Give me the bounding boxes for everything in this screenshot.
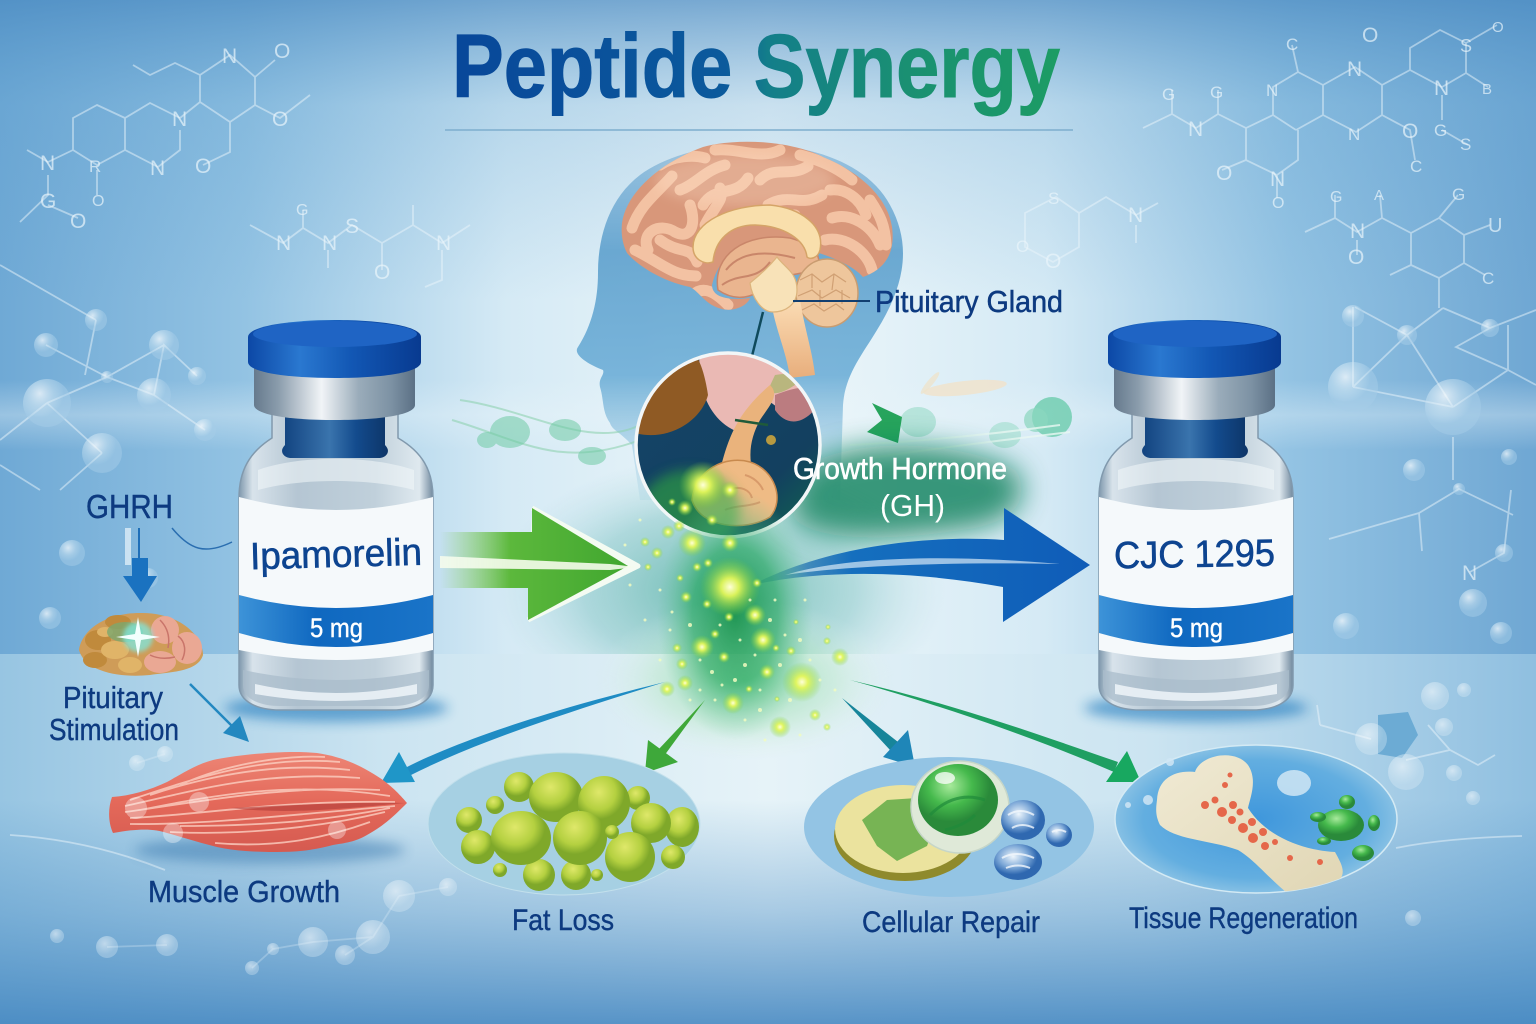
mini brain icon	[79, 613, 203, 676]
molecule atom labels: O	[1348, 246, 1364, 269]
translucent spots	[125, 792, 346, 843]
center teal glow	[520, 480, 922, 654]
lower green glow	[595, 600, 895, 760]
muscle fibres	[125, 757, 395, 844]
molecule atom labels: A	[1374, 187, 1384, 204]
cap	[1108, 320, 1281, 378]
tiny sparkle dots	[624, 518, 836, 742]
molecule atom labels: N	[1350, 220, 1365, 243]
cerebellum	[796, 259, 858, 327]
molecule atom labels: S	[1460, 135, 1471, 154]
green blotch	[862, 798, 937, 861]
decorative molecular spheres	[23, 305, 1517, 644]
molecule atom labels: N	[276, 232, 291, 255]
blue arrow to CJC vial	[752, 508, 1090, 622]
cerebrum	[622, 142, 893, 310]
connector to inset	[746, 312, 763, 380]
head silhouette	[577, 144, 903, 500]
blue cells	[1125, 758, 1311, 808]
molecule atom labels: O	[1402, 120, 1418, 143]
cap	[248, 320, 421, 378]
molecule atom labels: C	[1410, 157, 1422, 176]
molecule atom labels: G	[1434, 121, 1447, 140]
growth hormone label: Growth Hormone	[793, 451, 1007, 486]
molecule atom labels: C	[1482, 269, 1494, 288]
molecule atom labels: N	[322, 232, 337, 255]
arrow to muscle	[190, 684, 249, 742]
synergy sparkles	[624, 461, 849, 742]
pituitary stimulation label	[49, 680, 179, 747]
collar	[254, 368, 415, 420]
dish	[428, 753, 700, 895]
molecule atom labels: N	[1348, 125, 1360, 144]
dose: 5 mg	[310, 613, 363, 643]
molecule atom labels: N	[1266, 81, 1278, 100]
dish	[804, 757, 1094, 897]
cell disc	[835, 785, 971, 873]
vial: Ipamorelin	[224, 320, 448, 722]
molecule atom labels: O	[1016, 237, 1029, 256]
GHRH down arrow	[123, 528, 157, 602]
neck	[282, 416, 388, 458]
GHRH label: GHRH	[86, 488, 173, 525]
tissue regeneration	[1115, 745, 1397, 935]
dose: 5 mg	[1170, 613, 1223, 643]
molecule atom labels: O	[1045, 250, 1061, 273]
arrow to cellular repair	[842, 698, 915, 767]
pituitary stimulation label: Pituitary	[63, 680, 163, 715]
fat loss label: Fat Loss	[512, 904, 614, 937]
arrow to tissue regeneration	[850, 680, 1141, 782]
arrow to fat loss	[645, 700, 705, 773]
cell disc lower	[834, 791, 976, 881]
molecule atom labels: N	[40, 152, 55, 175]
growth hormone label: (GH)	[880, 488, 945, 523]
glass shoulder highlight	[258, 459, 414, 490]
green arrow to center	[440, 508, 638, 620]
band	[1099, 595, 1293, 647]
molecule atom labels: O	[1492, 19, 1504, 36]
brain gyri	[632, 150, 886, 305]
shadow	[224, 694, 448, 722]
molecule atom labels: N	[1462, 562, 1477, 585]
molecule atom labels: O	[1216, 162, 1232, 185]
base	[1103, 670, 1289, 706]
molecule atom labels: O	[70, 210, 86, 233]
blue cell markings	[1002, 811, 1066, 868]
molecule atom labels: O	[195, 155, 211, 178]
corpus callosum	[693, 205, 821, 263]
name: Ipamorelin	[249, 532, 423, 578]
molecule atom labels: S	[345, 215, 359, 238]
molecule atom labels: N	[1188, 118, 1203, 141]
green cell	[1310, 795, 1380, 861]
pituitary gland callout: Pituitary Gland	[875, 284, 1063, 319]
collar	[1114, 368, 1275, 420]
molecule atom labels: O	[92, 193, 104, 210]
GHRH connector	[172, 528, 232, 549]
vial: CJC 1295	[1084, 320, 1308, 722]
muscle growth	[109, 752, 407, 909]
molecule atom labels: U	[1488, 215, 1502, 237]
growth hormone label	[793, 451, 1007, 523]
molecule atom labels: N	[1270, 168, 1285, 191]
molecule atom labels: G	[1210, 83, 1223, 102]
brain stem	[773, 300, 815, 378]
lower background spheres	[50, 682, 1480, 975]
bone	[1156, 755, 1343, 895]
green cell	[911, 761, 1009, 853]
molecule atom labels: G	[1162, 85, 1175, 104]
shadow	[1084, 694, 1308, 722]
molecule atom labels: N	[1347, 58, 1362, 81]
cellular repair	[804, 757, 1094, 939]
molecule atom labels: O	[272, 108, 288, 131]
arrow from center to muscle	[381, 682, 665, 783]
molecule atom labels: N	[1434, 77, 1449, 100]
molecule atom labels: O	[274, 40, 290, 63]
molecule atom labels: S	[1460, 36, 1472, 56]
muscle growth label: Muscle Growth	[148, 874, 340, 909]
dish	[1115, 745, 1397, 893]
molecule atom labels: N	[222, 45, 237, 68]
growth hormone glow	[790, 446, 1023, 537]
molecule atom labels: G	[1452, 185, 1465, 204]
inner brain	[717, 237, 819, 297]
molecule atom labels: G	[40, 190, 56, 213]
band	[239, 595, 433, 647]
brain illustration	[622, 142, 893, 378]
name: CJC 1295	[1114, 533, 1275, 577]
pituitary stimulation label: Stimulation	[49, 712, 179, 747]
brain highlight	[655, 154, 835, 206]
label	[239, 497, 433, 660]
molecule atom labels	[40, 19, 1504, 585]
title divider	[445, 129, 1073, 131]
molecule atom labels: N	[172, 108, 187, 131]
cellular repair label: Cellular Repair	[862, 906, 1040, 939]
molecule atom labels: B	[1482, 81, 1492, 98]
glass body	[1099, 405, 1293, 710]
fat loss	[428, 753, 700, 937]
muscle shadow	[135, 836, 405, 864]
molecule atom labels: N	[1128, 204, 1143, 227]
molecule atom labels: O	[374, 261, 390, 284]
green leaf wisps	[452, 370, 1072, 465]
molecule atom labels: G	[296, 202, 308, 219]
pituitary inset circle	[634, 351, 822, 539]
glass shoulder highlight	[1118, 459, 1274, 490]
title: Peptide Synergy	[452, 17, 1060, 117]
fat cells	[456, 772, 699, 891]
glass body	[239, 405, 433, 710]
muscle	[109, 752, 407, 852]
label	[1099, 497, 1293, 660]
bone marrow	[1201, 772, 1323, 865]
molecule atom labels: C	[1286, 35, 1298, 54]
molecule atom labels: O	[1362, 24, 1378, 47]
molecule atom labels: N	[436, 232, 451, 255]
molecule atom labels: N	[150, 157, 165, 180]
base	[243, 670, 429, 706]
blue cells	[994, 800, 1072, 880]
tissue regeneration label: Tissue Regeneration	[1129, 902, 1358, 935]
molecule atom labels: O	[1272, 195, 1284, 212]
molecule atom labels: S	[1048, 189, 1059, 208]
neck	[1142, 416, 1248, 458]
molecule atom labels: R	[89, 157, 101, 176]
molecule atom labels: G	[1330, 189, 1342, 206]
